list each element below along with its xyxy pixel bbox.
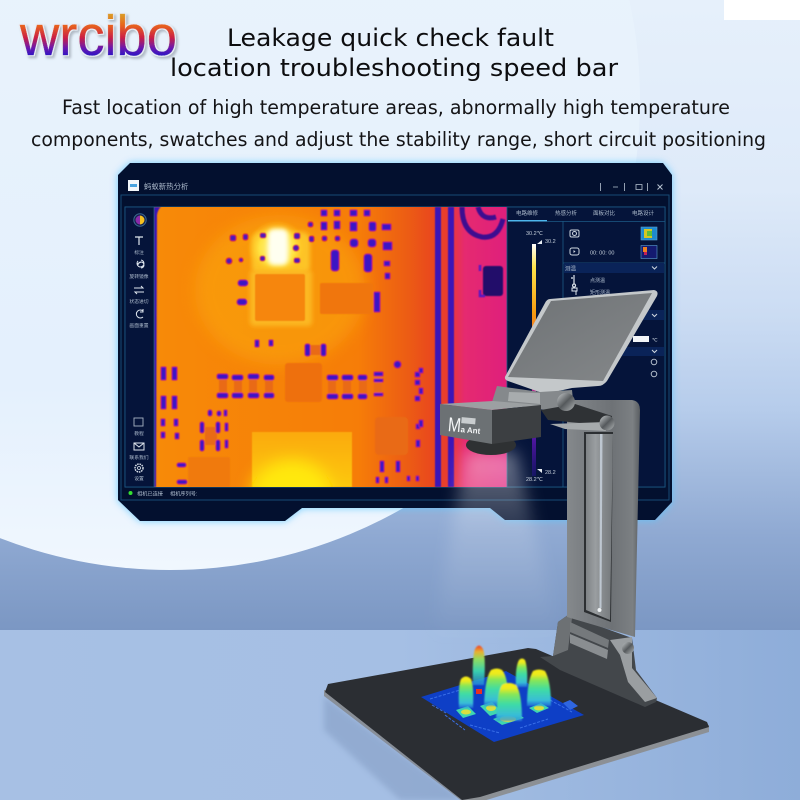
second chip — [320, 283, 373, 314]
arm slot outline — [584, 432, 613, 622]
rectangle measure — [572, 288, 610, 296]
tabs: 电路设计 — [632, 209, 654, 217]
background light circle — [0, 0, 640, 570]
colour scale bar — [532, 244, 536, 476]
point measure: 点测温 — [590, 277, 605, 284]
thermal image — [154, 207, 507, 487]
scale labels: 28.2 — [545, 470, 556, 476]
warm zone around chip — [195, 215, 365, 365]
camera top — [440, 401, 541, 410]
heat peaks — [459, 646, 551, 721]
scale labels: 30.2℃ — [526, 231, 544, 237]
tablet sensor plate — [505, 290, 658, 394]
subtitle line 1: Fast location of high temperature areas, abnormally high temperature — [62, 96, 730, 119]
slot inner — [586, 434, 613, 620]
scale labels — [526, 231, 556, 483]
brand logo: wrcibo — [19, 4, 177, 68]
temperature input: ℃ — [652, 338, 658, 344]
scale markers — [537, 240, 542, 473]
knob upper — [557, 393, 575, 411]
timer: 00: 00: 00 — [590, 250, 614, 256]
bottom warm chip — [243, 432, 352, 487]
foot body — [540, 615, 657, 707]
foot hinge cylinder — [570, 622, 609, 648]
window controls — [600, 183, 662, 191]
icon: tutorial — [134, 418, 143, 426]
section bar: measure: 测温 — [565, 264, 577, 272]
label: settings: 设置 — [134, 475, 144, 482]
base plate — [325, 648, 709, 800]
status bar — [128, 490, 197, 498]
tabs: 电路维修 — [516, 209, 538, 217]
serial text: 相机序列号: — [170, 490, 197, 498]
icon: mail — [134, 443, 144, 450]
cooler left edge — [154, 207, 161, 487]
monitor body — [118, 163, 672, 521]
label: rotate: 旋转镜像 — [129, 273, 149, 280]
section bar: measure — [564, 263, 664, 273]
thermal camera — [440, 401, 541, 455]
icon: camera — [570, 230, 579, 237]
label: mark: 标注 — [134, 249, 144, 256]
status dot — [128, 491, 132, 495]
capacitor bodies — [205, 345, 382, 445]
app logo — [128, 180, 139, 191]
icon: swap — [134, 286, 144, 294]
brand mark — [447, 414, 482, 439]
warm halo around hot chip — [252, 232, 310, 274]
status text: 相机已连接 — [137, 490, 163, 498]
light beam — [432, 452, 560, 640]
hinge barrel — [492, 386, 574, 410]
rectangle measure: 矩形测温 — [590, 289, 610, 296]
lower hinge highlight — [550, 422, 606, 431]
foot right leg — [610, 637, 657, 702]
PCB with heat map — [421, 646, 584, 742]
active tab underline — [508, 220, 547, 222]
base plate underside — [324, 690, 709, 800]
hot spot — [250, 222, 300, 268]
floor — [0, 630, 800, 800]
knob lower — [600, 416, 614, 430]
subtitle — [31, 96, 766, 151]
top right white patch — [724, 0, 800, 20]
lower left chip — [188, 457, 230, 487]
tabs: 热感分析 — [555, 209, 577, 217]
hinge dark gap — [541, 404, 612, 426]
icon: video — [570, 248, 579, 255]
brand mark: a Ant — [460, 425, 481, 436]
tabs: 面板对比 — [593, 209, 615, 217]
section bar 2 — [610, 310, 664, 320]
background wall — [0, 0, 800, 630]
title line 1: Leakage quick check fault — [227, 24, 554, 52]
title line 2: location troubleshooting speed bar — [170, 54, 618, 82]
scale labels: 30.2 — [545, 239, 556, 245]
camera left face — [440, 404, 492, 444]
plate rim — [505, 290, 658, 394]
slot gap — [600, 434, 602, 608]
app border — [125, 207, 665, 487]
icon: settings — [135, 464, 143, 472]
thermal base — [154, 207, 507, 487]
lens — [466, 435, 516, 455]
vertical trace stripes — [435, 207, 454, 487]
label: tutorial: 教程 — [134, 430, 144, 437]
icon: rotate — [137, 260, 144, 268]
heated chip pads — [456, 702, 549, 725]
red component — [476, 689, 482, 694]
label: contact: 联系我们 — [129, 454, 149, 461]
stand foot — [540, 615, 657, 707]
title — [170, 24, 618, 82]
thumbnail 2 — [641, 246, 657, 258]
panel background — [507, 207, 665, 487]
monitor glow — [118, 163, 672, 521]
board detail — [430, 690, 572, 733]
centre chip — [285, 363, 322, 402]
section bar 3 — [600, 347, 664, 356]
hinge recess — [570, 634, 608, 659]
tabs — [516, 209, 654, 217]
curved trace — [462, 207, 503, 237]
plate soft shadow — [324, 696, 463, 800]
foot knob — [622, 642, 634, 654]
upright arm — [567, 400, 640, 637]
circuit board — [421, 671, 584, 742]
plate face — [508, 293, 652, 381]
temperature input — [633, 336, 658, 344]
option icons — [651, 359, 657, 377]
label: reset: 画面重置 — [129, 322, 149, 329]
hot area components — [226, 222, 340, 264]
foot upper left — [553, 615, 572, 656]
arm body — [567, 400, 640, 637]
hinge highlight — [508, 392, 540, 404]
scale labels: 28.2℃ — [526, 477, 544, 483]
subtitle line 2: components, swatches and adjust the stability range, short circuit positioning — [31, 128, 766, 151]
lower right chip — [375, 417, 408, 455]
palette icon — [134, 214, 146, 226]
app title: 蚂蚁新热分析 — [144, 182, 189, 191]
panel dividers — [547, 221, 665, 487]
blue components — [161, 210, 423, 484]
camera right face — [492, 405, 541, 444]
icon: reset — [136, 309, 143, 318]
inspection stand — [324, 290, 709, 800]
right control panel — [507, 207, 665, 487]
main chip — [250, 270, 312, 326]
brand mark: M — [447, 414, 462, 437]
window frame line — [121, 195, 669, 500]
icon: text tool — [135, 237, 143, 245]
blue chip on pink area — [480, 265, 503, 296]
hinge — [492, 386, 614, 431]
point measure — [571, 275, 605, 287]
left toolbar — [125, 207, 154, 487]
toolbar background — [125, 207, 154, 487]
board connector — [563, 700, 578, 710]
pad hot centres — [461, 705, 544, 722]
label: status: 状态进切 — [129, 298, 149, 305]
monitor screen — [118, 163, 672, 528]
thumbnail 1 — [641, 227, 657, 240]
